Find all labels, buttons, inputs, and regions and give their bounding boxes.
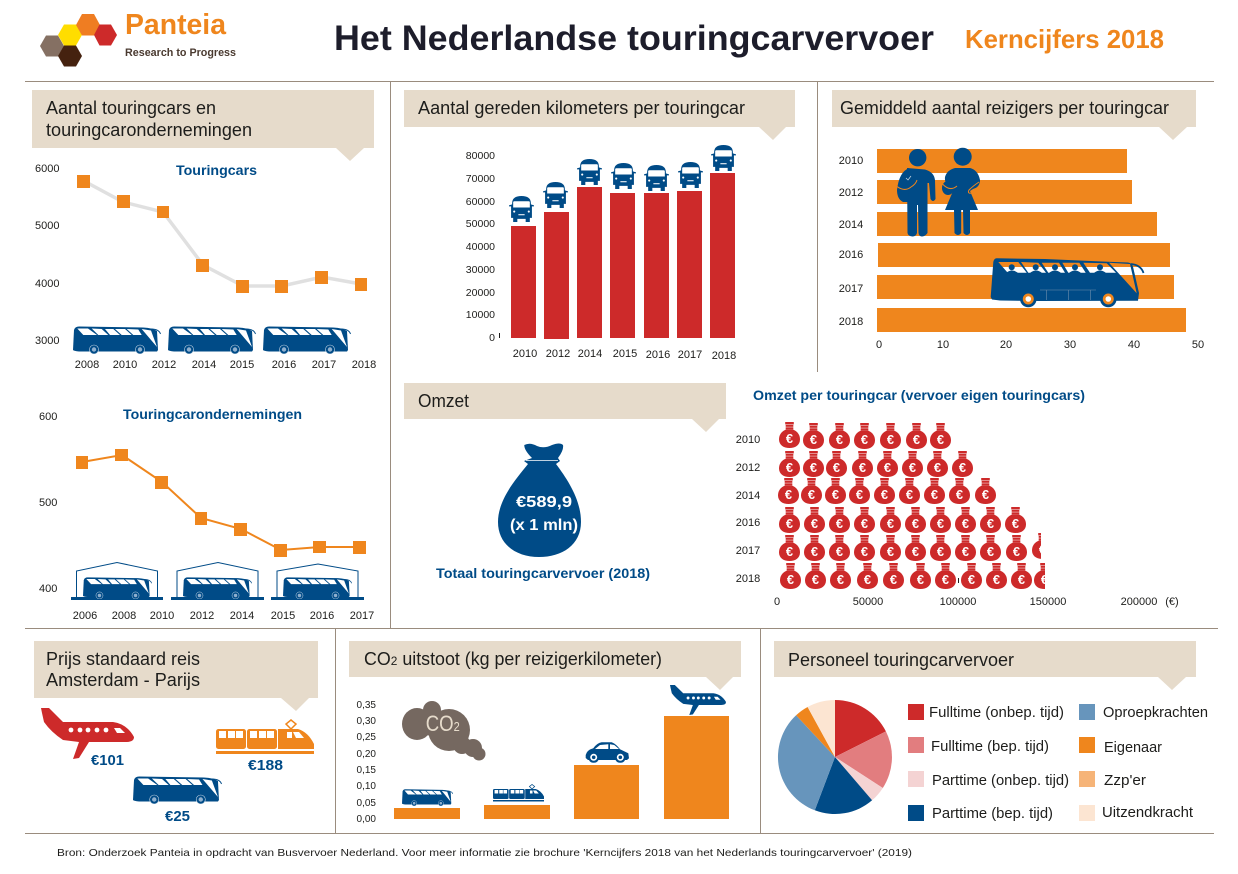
bar chart: kilometers: 40000 xyxy=(466,241,495,253)
pictogram chart: omzet per touringcar: 2017 xyxy=(736,545,760,557)
icon: train with price: €188 xyxy=(248,758,283,774)
line chart: touringcarondernemingen: 500 xyxy=(39,497,57,509)
panel: kilometers per touringcar xyxy=(404,90,795,362)
bar chart: co2: 0,15 xyxy=(357,765,376,776)
bar chart: co2: 0,20 xyxy=(357,749,376,760)
bar chart: kilometers: 10000 xyxy=(466,309,495,321)
caption: totaal: Totaal touringcarvervoer (2018) xyxy=(436,566,650,581)
pie chart: personeel xyxy=(778,700,892,814)
line chart: touringcars: 2008 xyxy=(75,359,99,371)
heading: prijs: Prijs standaard reis xyxy=(46,649,200,669)
line chart: touringcarondernemingen: 2008 xyxy=(112,610,136,622)
bar chart: reizigers: 2018 xyxy=(839,316,863,328)
pictogram chart: omzet per touringcar: 2014 xyxy=(736,490,760,502)
legend: personeel: Oproepkrachten xyxy=(1103,705,1208,721)
heading: prijs: Amsterdam - Parijs xyxy=(46,670,200,690)
logo: Panteia xyxy=(40,9,236,66)
line chart: touringcars: 2018 xyxy=(352,359,376,371)
line chart: touringcarondernemingen: 2014 xyxy=(230,610,254,622)
line chart: touringcars: 5000 xyxy=(35,220,59,232)
panel: omzet xyxy=(404,383,1179,608)
bar chart: kilometers: 0 xyxy=(489,332,495,344)
line chart: touringcars: 6000 xyxy=(35,163,59,175)
heading: reizigers xyxy=(832,90,1196,140)
title: Het Nederlandse touringcarvervoer xyxy=(334,19,934,58)
pictogram chart: omzet per touringcar: 2012 xyxy=(736,462,760,474)
line chart: touringcars: 2017 xyxy=(312,359,336,371)
legend: personeel xyxy=(908,704,1208,822)
line chart: touringcars: Touringcars xyxy=(176,163,257,178)
line chart: touringcarondernemingen: 2017 xyxy=(350,610,374,622)
line chart: touringcarondernemingen: 2006 xyxy=(73,610,97,622)
heading: personeel xyxy=(774,641,1196,690)
heading: reizigers: Gemiddeld aantal reizigers per touringcar xyxy=(840,98,1169,118)
subtitle: Kerncijfers 2018 xyxy=(965,24,1164,54)
icon: money bag with total: (x 1 mln) xyxy=(510,517,578,534)
icon: co2 cloud: CO2 xyxy=(426,711,460,736)
bar chart: co2: 0,30 xyxy=(357,716,376,727)
panel: aantal touringcars xyxy=(32,90,376,622)
bar chart: reizigers: 30 xyxy=(1064,339,1076,351)
bar chart: co2 xyxy=(357,685,729,825)
bar chart: co2: 0,25 xyxy=(357,732,376,743)
source note: Bron: Onderzoek Panteia in opdracht van Busvervoer Nederland. Voor meer informatie zie brochure 'Kerncijfers 2018 van het Nederlands touringcarvervoer' (2019) xyxy=(57,847,912,859)
bar chart: co2: 0,35 xyxy=(357,700,376,711)
bar chart: reizigers: 2014 xyxy=(839,219,863,231)
icon: plane with price: €101 xyxy=(91,753,124,769)
bar chart: reizigers: 50 xyxy=(1192,339,1204,351)
icon: woman with backpack xyxy=(942,148,980,235)
heading: kilometers: Aantal gereden kilometers per touringcar xyxy=(418,98,745,118)
icon: man with backpack xyxy=(897,149,936,236)
heading: personeel: Personeel touringcarvervoer xyxy=(788,650,1014,670)
line chart: touringcars: 4000 xyxy=(35,278,59,290)
heading: kilometers xyxy=(404,90,795,140)
icon: car xyxy=(586,742,629,763)
bar chart: kilometers: 20000 xyxy=(466,287,495,299)
line chart: touringcarondernemingen: 2016 xyxy=(310,610,334,622)
bar chart: co2: 0,05 xyxy=(357,798,376,809)
pictogram chart: omzet per touringcar: 150000 xyxy=(1030,596,1066,608)
bar chart: kilometers xyxy=(466,145,736,362)
line chart: touringcarondernemingen: Touringcarondernemingen xyxy=(123,407,302,422)
bar chart: kilometers: 50000 xyxy=(466,218,495,230)
bar chart: kilometers: 80000 xyxy=(466,150,495,162)
icon: train with price xyxy=(216,720,314,774)
pictogram chart: omzet per touringcar: (€) xyxy=(1165,596,1179,608)
bar chart: reizigers: 20 xyxy=(1000,339,1012,351)
bar chart: kilometers: 2014 xyxy=(578,348,602,360)
line chart: touringcarondernemingen: 2012 xyxy=(190,610,214,622)
icon: plane with price xyxy=(41,708,134,769)
heading: prijs xyxy=(34,641,318,711)
icon: co2 cloud xyxy=(402,701,486,760)
icon: bus with price: €25 xyxy=(165,809,190,825)
panel: prijs standaard reis xyxy=(34,641,318,825)
pictogram chart: omzet per touringcar: 2018 xyxy=(736,573,760,585)
bar chart: reizigers: 2012 xyxy=(839,187,863,199)
legend: personeel: Parttime (onbep. tijd) xyxy=(932,773,1069,789)
panel: personeel xyxy=(774,641,1208,822)
pictogram chart: omzet per touringcar: 200000 xyxy=(1121,596,1157,608)
pictogram chart: omzet per touringcar: Omzet per touringcar (vervoer eigen touringcars) xyxy=(753,388,1085,403)
icon: money bag with total: €589,9 xyxy=(516,494,572,511)
legend: personeel: Fulltime (onbep. tijd) xyxy=(929,705,1064,721)
bar chart: kilometers: 2012 xyxy=(546,348,570,360)
heading: aantal touringcars xyxy=(32,90,374,161)
bar chart: kilometers: 2017 xyxy=(678,349,702,361)
line chart: touringcarondernemingen xyxy=(39,407,374,622)
line chart: touringcars xyxy=(35,163,376,371)
bar chart: co2: 0,00 xyxy=(357,814,376,825)
heading: aantal touringcars: touringcarondernemingen xyxy=(46,120,252,140)
line chart: touringcars: 2016 xyxy=(272,359,296,371)
line chart: touringcarondernemingen: 400 xyxy=(39,583,57,595)
bar chart: kilometers: 60000 xyxy=(466,196,495,208)
bar chart: reizigers: 10 xyxy=(937,339,949,351)
line chart: touringcars: 2015 xyxy=(230,359,254,371)
bar chart: reizigers: 2017 xyxy=(839,283,863,295)
icon: bus with passengers xyxy=(991,258,1144,307)
bar chart: kilometers: 2018 xyxy=(712,350,736,362)
logo: Panteia: Panteia xyxy=(125,9,227,41)
legend: personeel: Uitzendkracht xyxy=(1102,805,1193,821)
line chart: touringcarondernemingen: 2015 xyxy=(271,610,295,622)
heading: co2: CO2 uitstoot (kg per reizigerkilometer) xyxy=(364,649,662,669)
line chart: touringcarondernemingen: 2010 xyxy=(150,610,174,622)
pictogram chart: omzet per touringcar: 2010 xyxy=(736,434,760,446)
pictogram chart: omzet per touringcar: 50000 xyxy=(853,596,883,608)
bar chart: reizigers: 2010 xyxy=(839,155,863,167)
bar chart: reizigers: 0 xyxy=(876,339,882,351)
legend: personeel: Fulltime (bep. tijd) xyxy=(931,739,1049,755)
heading: omzet xyxy=(404,383,726,432)
bar chart: reizigers: 40 xyxy=(1128,339,1140,351)
line chart: touringcarondernemingen: 600 xyxy=(39,411,57,423)
line chart: touringcars: 2014 xyxy=(192,359,216,371)
legend: personeel: Zzp'er xyxy=(1104,773,1146,789)
legend: personeel: Parttime (bep. tijd) xyxy=(932,806,1053,822)
bar chart: kilometers: 2016 xyxy=(646,349,670,361)
bar chart: kilometers: 70000 xyxy=(466,173,495,185)
heading: aantal touringcars: Aantal touringcars en xyxy=(46,98,216,118)
bar chart: reizigers xyxy=(839,149,1204,351)
line chart: touringcars: 2010 xyxy=(113,359,137,371)
pictogram chart: omzet per touringcar xyxy=(736,388,1179,608)
bar chart: kilometers: 30000 xyxy=(466,264,495,276)
bar chart: reizigers: 2016 xyxy=(839,249,863,261)
bar chart: kilometers: 2010 xyxy=(513,348,537,360)
icon: money bag with total xyxy=(498,444,581,557)
logo: Panteia: Research to Progress xyxy=(125,47,236,59)
legend: personeel: Eigenaar xyxy=(1104,740,1162,756)
panel: co2 uitstoot xyxy=(349,641,741,825)
pictogram chart: omzet per touringcar: 100000 xyxy=(940,596,976,608)
pictogram chart: omzet per touringcar: 0 xyxy=(774,596,780,608)
heading: co2 xyxy=(349,641,741,690)
line chart: touringcars: 3000 xyxy=(35,335,59,347)
heading: omzet: Omzet xyxy=(418,391,469,411)
bar chart: co2: 0,10 xyxy=(357,781,376,792)
icon: bus with price xyxy=(133,776,221,825)
line chart: touringcars: 2012 xyxy=(152,359,176,371)
bar chart: kilometers: 2015 xyxy=(613,348,637,360)
pictogram chart: omzet per touringcar: 2016 xyxy=(736,517,760,529)
panel: reizigers per touringcar xyxy=(832,90,1204,351)
